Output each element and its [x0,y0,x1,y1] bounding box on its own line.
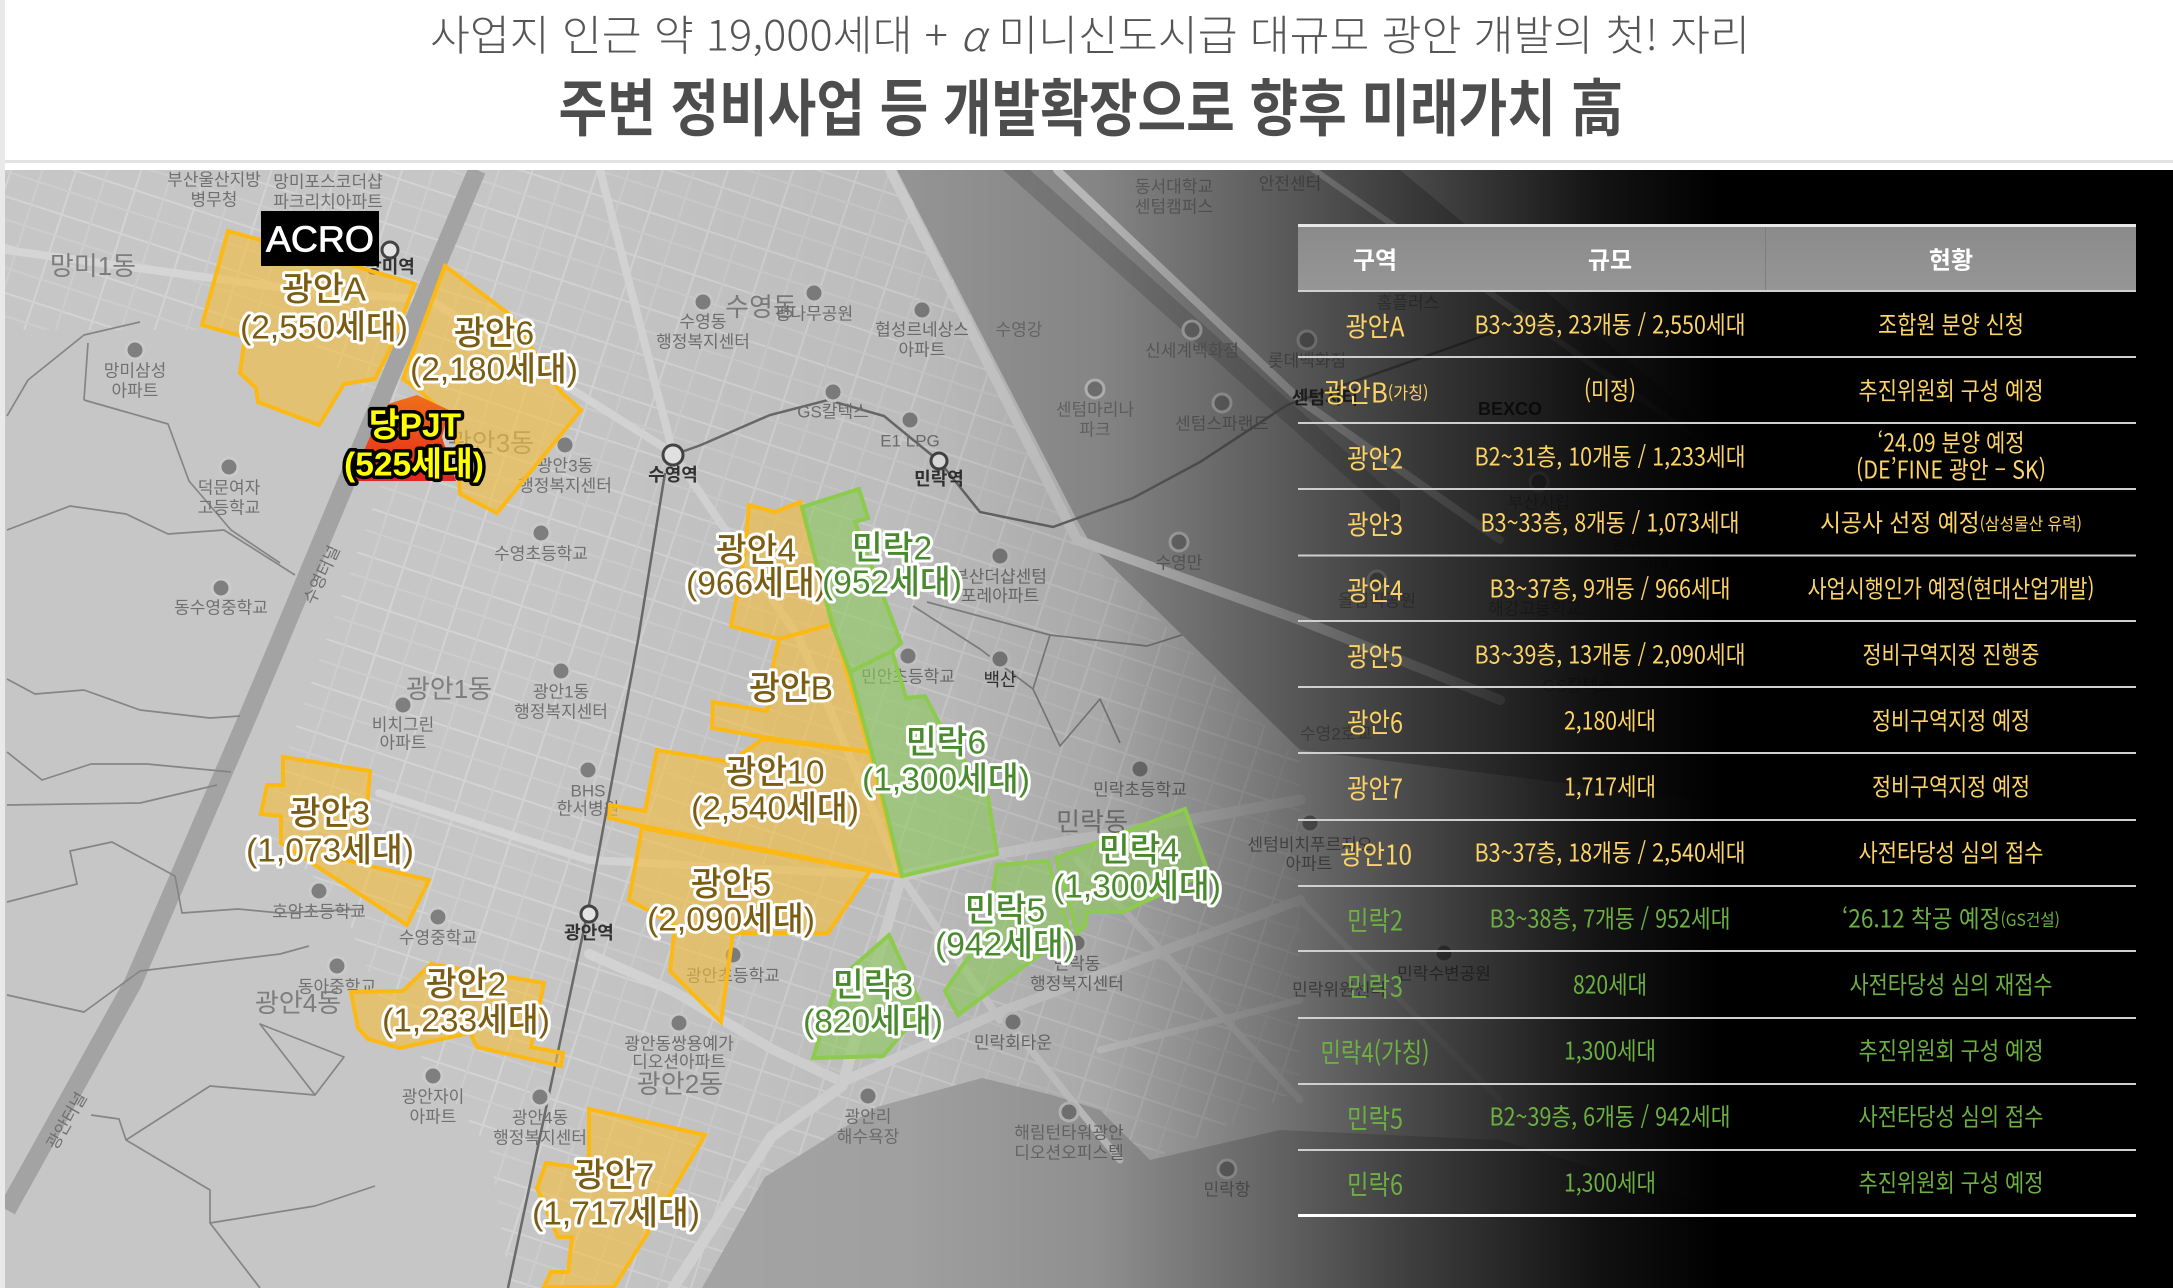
table row: 광안3 [1347,504,2082,542]
map place names: 광안초등학교 [686,966,780,986]
map place names: 수영동 [725,292,797,322]
map place names: 비치그린 [372,716,434,734]
map place names: 센텀비치푸르지오 [1247,836,1373,854]
map place names: 광안2동 [637,1069,723,1099]
map place names: GS칼텍스 [1542,676,1614,696]
map place names: 수영역 [648,465,698,485]
map place names: 해수욕장 [837,1128,900,1146]
table row: 광안3: 광안3 [1347,504,1403,542]
zone labels: 광안7 [574,1158,654,1194]
table row: 광안10: 광안10 [1340,834,1412,872]
table row: 광안10: 사전타당성 심의 접수 [1858,834,2044,870]
map place names: 망미1동 [50,251,136,281]
map place names: 광안자이 [402,1088,464,1106]
table row: 광안4: 광안4 [1347,570,1403,608]
table row: 광안5: B3~39층, 13개동 / 2,090세대 [1474,636,1746,672]
map place names: E1 LPG [880,432,940,450]
table row: 민락2 [1347,900,2060,938]
map place names: 민락역 [914,469,964,489]
table row: 민락3: 민락3 [1347,966,1403,1004]
panel: status table [1298,224,2136,1217]
table row: 광안2: B2~31층, 10개동 / 1,233세대 [1474,438,1746,474]
map place names: 한서병원 [557,800,619,818]
dark gradient overlay [822,170,2173,1288]
table row: 광안10 [1340,834,2044,872]
zone labels: 민락4 [1099,832,1179,870]
map place names: BEXCO [1478,399,1542,419]
map place names: GS칼텍스 [797,402,869,422]
map place names: 행정복지센터 [1030,974,1124,994]
map place names: 디오션아파트 [632,1052,726,1072]
map place names: 민락동 [1054,954,1100,974]
map place names: 광안동쌍용예가 [624,1034,734,1054]
map place names: 협성르네상스 [875,320,969,340]
zone labels: (2,540세대) [691,790,859,828]
zone labels: 광안3 [290,796,370,832]
map place names: 민락수변공원 [1397,964,1491,984]
map place names: 아파트 [899,340,945,360]
zone labels: (1,233세대) [382,1002,550,1040]
map place names: 동수영중학교 [174,598,268,618]
table row: 광안2: (DE’FINE 광안 – SK) [1856,452,2046,486]
map place names: 광안리 [845,1108,891,1126]
zone labels: 광안10 [726,754,824,792]
table row: 광안2: 광안2 [1347,438,1403,476]
map place names: 홈플러스 [1377,294,1439,312]
map place names: 파크리치아파트 [273,192,383,212]
map place names: 동서대학교 [1135,178,1213,196]
zone labels: 민락3 [833,968,913,1004]
table header: 현황 [1929,240,1973,276]
map place names: 아파트 [410,1108,456,1126]
map place names: 망미삼성 [104,362,166,380]
zone labels: 민락2 [852,530,932,568]
table row: 광안6: 광안6 [1347,702,1403,740]
map place names: 아파트 [1644,556,1690,574]
map place names: 병무청 [191,190,237,210]
map place names: 광안터널 [43,1089,91,1153]
table row: 광안6: 정비구역지정 예정 [1872,702,2030,738]
map place names: 올림픽공원 [1338,592,1416,610]
mountain trails [7,322,1182,1288]
table row: 광안5: 정비구역지정 진행중 [1862,636,2040,672]
map place pins [126,284,1548,1178]
map place names: 아파트 [1286,854,1332,874]
table row: 민락2: B3~38층, 7개동 / 952세대 [1490,900,1730,936]
map place names: 호암초등학교 [272,902,366,922]
ACRO logo: ACRO [266,218,374,260]
table row: 광안5: 광안5 [1347,636,1403,674]
zone labels: 광안6 [454,316,534,352]
map place names: 평나무공원 [775,304,853,324]
table row: 민락5 [1347,1098,2044,1136]
map place names: 행정복지센터 [514,702,608,722]
table row: 민락4: 1,300세대 [1564,1032,1656,1068]
table header [1298,224,2136,292]
zone labels: (1,300세대) [1053,868,1221,906]
map place names: 민락항 [1204,1180,1251,1200]
zone labels: 민락6 [906,724,986,762]
당PJT label: 당PJT [369,408,462,444]
table row: 민락6: 민락6 [1347,1164,1403,1202]
map place names: 포레아파트 [961,586,1039,606]
map place names: 수영동 [680,312,726,332]
map place names: 광안1동 [533,682,589,702]
map place names: 수영중학교 [399,928,477,948]
zone labels: (966세대) [686,566,826,602]
zone labels: 민락5 [965,892,1045,930]
table row: 민락2: ‘26.12 착공 예정(GS건설) [1842,900,2060,936]
table row: 민락3: 820세대 [1573,966,1647,1002]
table row: 광안4 [1347,570,2094,608]
map place names: 광안3동 [448,428,534,458]
map place names: 부산울산지방 [167,170,261,190]
table row: 광안6: 2,180세대 [1564,702,1656,738]
table row: 민락4: 민락4(가칭) [1320,1032,1430,1070]
zone labels: 광안5 [691,866,771,904]
zone labels: (1,717세대) [532,1196,700,1232]
map place names: BHS [571,782,605,800]
map place names: 수영초등학교 [494,544,588,564]
main roads [5,160,1700,1288]
zone labels: 광안B [749,670,833,708]
table row: 광안B [1324,372,2044,410]
map place names: 센텀캠퍼스 [1135,198,1213,216]
table row: 광안10: B3~37층, 18개동 / 2,540세대 [1474,834,1746,870]
zone labels: (952세대) [822,564,962,602]
table row: 광안7 [1347,768,2030,806]
table row: 민락4: 추진위원회 구성 예정 [1858,1032,2044,1068]
map place names: 동부올림픽타운 [1610,534,1720,554]
zone polygons: orange 광안 [202,231,901,1287]
table header: 구역 [1353,240,1397,276]
map place names: 센텀마리나 [1056,400,1134,420]
table row: 민락3: 사전타당성 심의 재접수 [1850,966,2052,1002]
map place names: 수영만 [1156,554,1203,572]
table row: 광안A: 조합원 분양 신청 [1878,306,2024,342]
table row: 광안5 [1347,636,2040,674]
table row: 광안6 [1347,702,2030,740]
map place names: 신세계백화점 [1145,342,1239,360]
table row: 민락3 [1347,966,2052,1004]
zone labels: (2,180세대) [410,352,578,388]
map place names: 부산더샵센텀 [953,568,1047,586]
map place names: 해림턴타워광안 [1014,1124,1124,1142]
map place names: 롯데백화점 [1268,352,1346,370]
subway lines [508,330,1500,1288]
map place names: 수영강 [996,320,1043,340]
table row: 광안B: (미정) [1584,372,1636,408]
map place names: 안전센터 [1259,174,1321,194]
table row: 광안2: ‘24.09 분양 예정 [1878,424,2024,460]
table row: 광안7: 정비구역지정 예정 [1872,768,2030,804]
map place names: 해강고등학교 [1488,600,1582,618]
title: subtitle line: 사업지 인근 약 19,000세대 + α 미니신도시급 대규모 광안 개발의 첫! 자리 [430,2,1750,64]
map place names: 광안4동 [255,988,341,1018]
map place names: 동아중학교 [298,978,376,996]
table row: 광안2 [1347,424,2046,486]
table row: 민락6 [1347,1164,2044,1202]
table row: 민락5: 민락5 [1347,1098,1403,1136]
map place names: 망미역 [365,257,415,277]
zone labels: (2,550세대) [240,310,408,346]
zone labels: (820세대) [803,1004,943,1040]
map place names: 행정복지센터 [656,332,750,352]
map place names: 행정복지센터 [518,476,612,496]
ACRO logo [261,211,379,266]
map place names: 파크 [1079,420,1111,440]
table row: 광안7: 1,717세대 [1564,768,1656,804]
zone labels: (1,073세대) [246,832,414,870]
map place names: 센텀시티 [1292,388,1358,408]
map place names: 광안3동 [537,456,593,476]
table row: 민락5: B2~39층, 6개동 / 942세대 [1490,1098,1730,1134]
table row: 광안B: 추진위원회 구성 예정 [1858,372,2044,408]
map place names: 광안1동 [406,674,492,704]
map place names: 고등학교 [198,498,260,518]
map place names: 디오션오피스텔 [1014,1144,1124,1162]
zone labels: 광안A [282,272,367,308]
map place names: 행정복지센터 [493,1128,587,1148]
zone labels: 광안4 [716,532,796,570]
zone labels [240,272,1221,1232]
table row: 민락5: 사전타당성 심의 접수 [1858,1098,2044,1134]
zone labels: (942세대) [935,926,1075,964]
map place names [46,171,1541,1197]
당PJT label: (525세대) [344,446,484,484]
zone polygons: green 민락 [802,489,1208,1058]
table row: 민락2: 민락2 [1347,900,1403,938]
map place names: 수영터널 [300,543,344,607]
map place names: 민락회타운 [974,1034,1052,1052]
당PJT label [344,408,484,484]
table row: 광안4: B3~37층, 9개동 / 966세대 [1490,570,1730,606]
map place names: 센텀스파랜드 [1175,414,1269,434]
table header: 규모 [1588,240,1632,276]
map place names: 부산시립 [1508,494,1570,512]
table row: 광안A: B3~39층, 23개동 / 2,550세대 [1474,306,1746,342]
map place names: 광안역 [564,923,614,943]
table row: 민락6: 1,300세대 [1564,1164,1656,1200]
map place names: 아파트 [380,734,426,752]
subway station markers [382,242,947,922]
table row: 광안7: 광안7 [1347,768,1403,806]
map place names: 백산 [983,670,1017,690]
map place names: 광안4동 [512,1108,568,1128]
table row: 광안3: B3~33층, 8개동 / 1,073세대 [1480,504,1740,540]
map place names: 망미포스코더샵 [273,172,383,192]
map place names: 아파트 [112,382,158,400]
zone polygon: 당PJT site [351,395,456,481]
title: main heading: 주변 정비사업 등 개발확장으로 향후 미래가치 高 [558,76,1624,144]
table row: 광안4: 사업시행인가 예정(현대산업개발) [1808,570,2094,606]
zone labels: 광안2 [426,966,506,1004]
map place names: 수영2호교 [1300,724,1372,744]
table row: 광안3: 시공사 선정 예정(삼성물산 유력) [1820,504,2082,540]
table row: 광안B: 광안B(가칭) [1324,372,1428,410]
map place names: 민락위원센터 [1292,980,1386,1000]
table row: 민락6: 추진위원회 구성 예정 [1858,1164,2044,1200]
railway band [7,170,477,1210]
table row: 민락4 [1320,1032,2044,1070]
map place names: 덕문여자 [198,478,261,498]
header [430,2,1750,144]
table row: 광안A [1346,306,2024,344]
map place names: 민락동 [1056,807,1128,837]
zone labels: (2,090세대) [647,902,815,938]
table row: 광안A: 광안A [1346,306,1405,344]
map place names: 민안초등학교 [861,668,955,686]
river and bay [702,170,1534,1288]
zone labels: (1,300세대) [862,762,1030,798]
map place names: 민락초등학교 [1093,780,1187,800]
